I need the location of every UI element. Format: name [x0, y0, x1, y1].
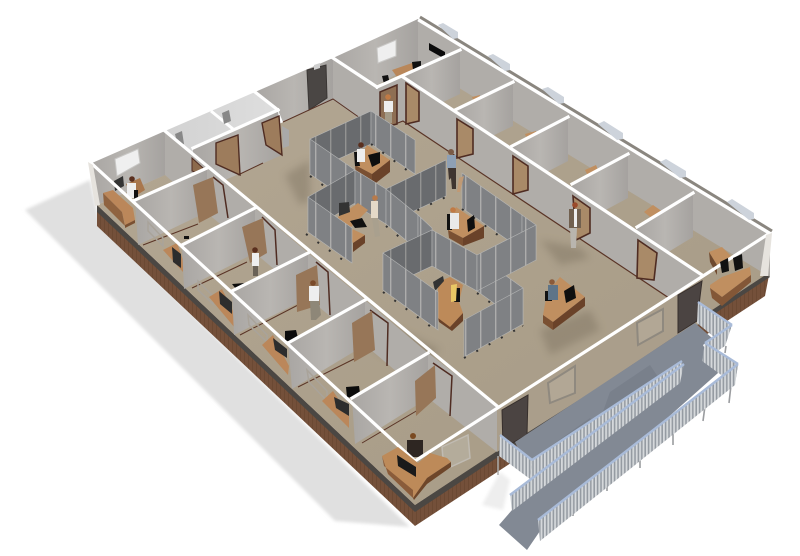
monitor [397, 455, 416, 477]
desk [322, 391, 349, 428]
desk [209, 289, 235, 328]
window [377, 40, 396, 63]
glass door [148, 222, 163, 246]
door [380, 85, 397, 128]
walking man [309, 280, 321, 320]
office divider walls and desks, right row [403, 50, 732, 275]
door [262, 116, 282, 155]
left office 6, corner [352, 353, 497, 457]
foundation base [97, 205, 770, 526]
cubicle cluster D [383, 225, 536, 358]
ramp railings, upper platform [697, 302, 738, 385]
end wall stubs [88, 162, 772, 276]
ramp deck [499, 323, 718, 550]
chair [346, 386, 360, 398]
wall between exit-door bay and top office [283, 58, 377, 131]
seated blond woman [451, 284, 460, 302]
left office 5 [288, 300, 428, 428]
white wall tops [90, 50, 770, 461]
door [678, 281, 702, 333]
chair [285, 330, 298, 342]
right corner desk [710, 254, 751, 306]
window [548, 366, 575, 403]
standing man [371, 195, 380, 237]
building drop shadow [25, 180, 510, 527]
door [216, 135, 240, 175]
man with dolly [447, 149, 464, 192]
cubicle cluster A [310, 111, 415, 208]
door [637, 240, 657, 280]
trim [377, 121, 702, 320]
desk [448, 207, 484, 246]
top office furniture [382, 43, 445, 84]
ramp railing, inner upper [530, 361, 682, 479]
desk [163, 236, 189, 272]
desk E with seated man [543, 277, 585, 330]
floor shadows [285, 160, 600, 372]
door [513, 156, 528, 194]
back desk [126, 178, 145, 198]
monitor [114, 176, 124, 191]
door [193, 177, 228, 223]
desk [103, 190, 135, 228]
inner restroom wall with doors [193, 110, 289, 194]
bathrooms [165, 92, 278, 190]
top office back wall [333, 19, 418, 85]
chair [232, 283, 245, 289]
bottom corner desk [382, 447, 451, 500]
left office 4 [232, 253, 365, 375]
seated man [447, 207, 459, 230]
corridor wall, right offices, with doors [377, 77, 702, 320]
door [307, 65, 327, 110]
ramp railing, outer with support legs [538, 346, 738, 541]
filing cabinet [282, 126, 289, 148]
landing front railing [498, 435, 532, 479]
right offices outer wall [418, 19, 770, 277]
seated woman [354, 142, 365, 166]
glass door [307, 370, 327, 401]
left office 1 [103, 131, 207, 228]
desk [433, 276, 463, 331]
exterior entrance wall [497, 278, 702, 452]
glass door [198, 281, 213, 304]
desk [262, 335, 289, 375]
door [573, 196, 590, 240]
door [457, 119, 473, 158]
door [352, 310, 388, 366]
door [406, 83, 419, 124]
woman [252, 247, 259, 276]
desk [338, 202, 368, 252]
door [296, 262, 330, 315]
window [637, 309, 663, 345]
cubicle cluster C [386, 149, 536, 262]
seated person [407, 433, 423, 457]
ghost window in corner office [442, 435, 470, 470]
floor [97, 62, 770, 505]
rooftop units [438, 23, 754, 220]
glass door [248, 315, 267, 342]
window [115, 149, 140, 176]
back wall: left office with window [92, 131, 165, 205]
left office 3 [182, 208, 308, 328]
standing man in doorway [384, 94, 393, 123]
standing man in brown suit [569, 202, 581, 248]
cubicle cluster B [306, 170, 432, 265]
outer north-east wall top [418, 17, 772, 234]
door [502, 395, 528, 448]
ramp railing, middle [510, 364, 684, 511]
left office 2 [135, 168, 255, 272]
door [415, 363, 452, 416]
door [242, 217, 277, 265]
desk [355, 145, 390, 186]
back wall with dark exit door [255, 58, 333, 122]
woman [127, 176, 138, 199]
